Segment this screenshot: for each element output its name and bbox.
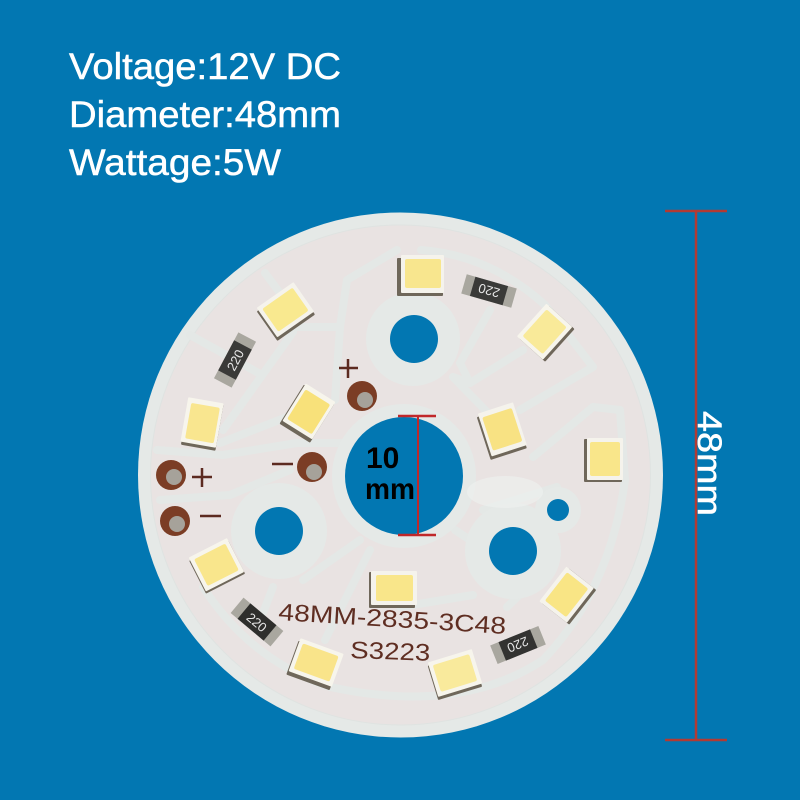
polarity marks xyxy=(192,359,358,516)
inner diameter dimension xyxy=(365,416,436,535)
board markings: 48MM-2835-3C48 xyxy=(278,599,507,640)
specification text: Wattage:5W xyxy=(69,142,281,183)
inner diameter dimension: 10 xyxy=(366,442,399,475)
specification text xyxy=(69,46,341,183)
resistors marked 220: 220 xyxy=(244,610,270,635)
specification text: Voltage:12V DC xyxy=(69,46,341,87)
specification text: Diameter:48mm xyxy=(69,94,341,135)
outer diameter dimension: 48mm xyxy=(690,411,728,516)
resistors marked 220 xyxy=(214,274,546,664)
copper traces xyxy=(157,250,625,696)
solder pads xyxy=(156,381,377,536)
circular LED circuit board xyxy=(138,212,663,738)
resistors marked 220: 220 xyxy=(224,347,247,373)
inner diameter dimension: mm xyxy=(365,473,415,506)
board markings: S3223 xyxy=(350,637,431,667)
resistors marked 220: 220 xyxy=(477,280,502,301)
mounting holes xyxy=(255,315,569,575)
LEDs xyxy=(180,255,623,700)
gloss highlight xyxy=(467,476,543,508)
board markings xyxy=(278,599,507,667)
resistors marked 220: 220 xyxy=(505,634,531,656)
